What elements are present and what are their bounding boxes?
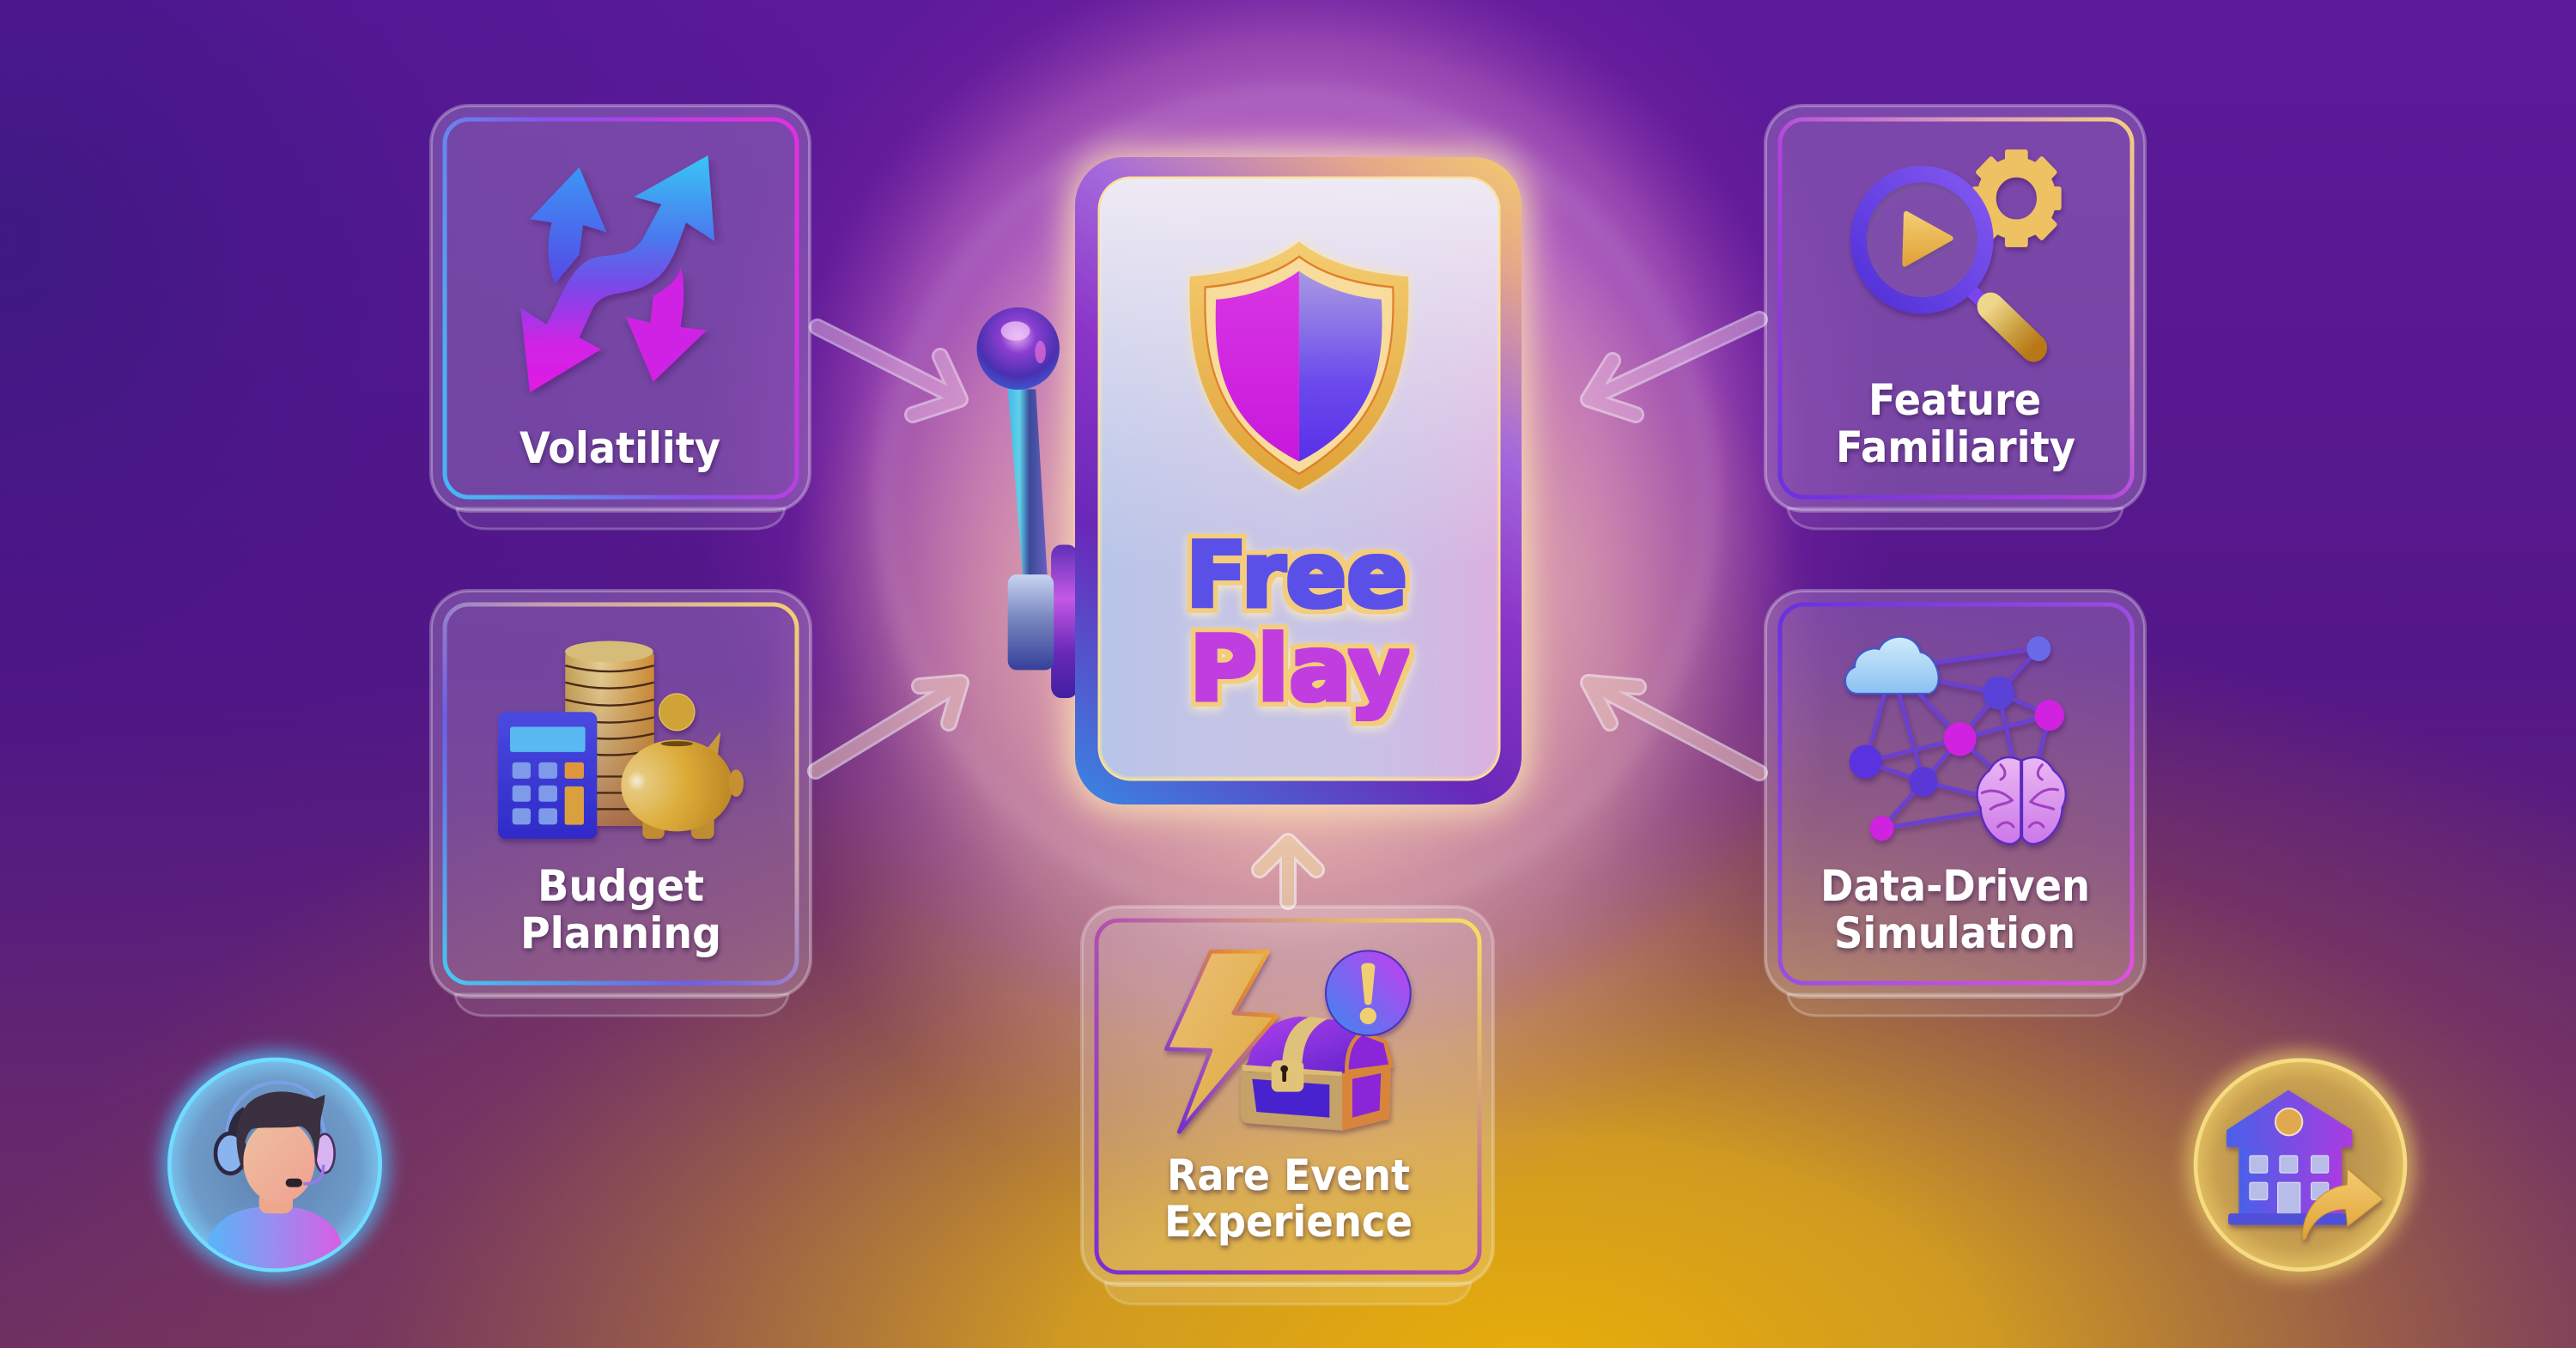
slot machine <box>976 150 1528 811</box>
icon: magnifier with play and gear <box>1858 149 2062 348</box>
label: Budget: Budget <box>538 861 704 911</box>
arrow: budget planning to machine <box>816 683 961 771</box>
machine frame <box>1075 157 1522 805</box>
heading: Free: Free <box>1186 523 1407 628</box>
lever <box>976 307 1078 698</box>
icon: calculator, coins and piggy bank <box>498 641 744 839</box>
machine glow <box>1068 150 1528 811</box>
panel: volatility <box>431 106 810 529</box>
icon: cloud network and brain <box>1845 636 2066 844</box>
arrow: feature familiarity to machine <box>1589 319 1759 415</box>
icon: volatility arrows <box>520 155 714 392</box>
icon: player avatar with headset <box>161 1050 389 1288</box>
icon: lightning bolt and treasure chest with alert <box>1166 950 1411 1132</box>
label: Data-Driven: Data-Driven <box>1820 861 2090 911</box>
panel: feature familiarity <box>1765 106 2145 529</box>
label: Familiarity: Familiarity <box>1836 422 2075 472</box>
panel: budget planning <box>431 591 811 1016</box>
screen panel <box>1100 179 1498 779</box>
label: Rare Event: Rare Event <box>1167 1151 1410 1200</box>
panel: data-driven simulation <box>1765 591 2145 1016</box>
label: Experience: Experience <box>1164 1197 1413 1247</box>
heading: Play: Play <box>1189 616 1409 721</box>
label: Simulation: Simulation <box>1834 908 2075 958</box>
shield icon <box>1189 241 1408 490</box>
arrow: data-driven simulation to machine <box>1589 683 1759 773</box>
label: Planning: Planning <box>520 908 721 958</box>
panel: rare event experience <box>1082 907 1493 1304</box>
icon: casino building with exit arrow <box>2186 1050 2415 1279</box>
label: Feature: Feature <box>1868 375 2041 425</box>
arrow: volatility to machine <box>817 327 960 415</box>
label: Volatility: Volatility <box>519 423 720 473</box>
arrow: rare event experience to machine <box>1260 841 1316 902</box>
